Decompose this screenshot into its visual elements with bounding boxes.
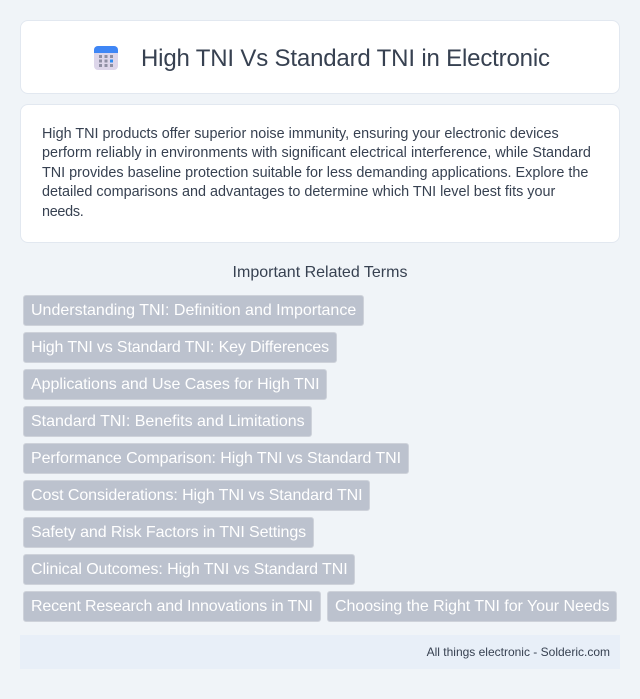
intro text: detailed comparisons and advantages to determine which TNI level best fits your [42, 184, 555, 200]
intro text: perform reliably in environments with significant electrical interference, while Standard [42, 145, 591, 161]
tag [23, 480, 370, 511]
footer [20, 635, 620, 669]
tag: Cost Considerations: High TNI vs Standard TNI [31, 487, 363, 504]
tag: Safety and Risk Factors in TNI Settings [31, 524, 306, 541]
tag: Understanding TNI: Definition and Importance [31, 302, 356, 319]
tag: Performance Comparison: High TNI vs Standard TNI [31, 450, 401, 467]
tag: High TNI vs Standard TNI: Key Differences [31, 339, 329, 356]
tag: Recent Research and Innovations in TNI [31, 598, 313, 615]
tag: Standard TNI: Benefits and Limitations [31, 413, 305, 430]
footer text: All things electronic - Solderic.com [427, 645, 610, 659]
section heading: Important Related Terms [233, 264, 407, 281]
intro text: High TNI products offer superior noise immunity, ensuring your electronic devices [42, 126, 559, 142]
tag: Applications and Use Cases for High TNI [31, 376, 320, 393]
intro panel [20, 104, 620, 243]
tag [23, 554, 355, 585]
tag [23, 295, 364, 326]
tag [23, 332, 337, 363]
tag [327, 591, 617, 622]
tag [23, 443, 409, 474]
intro text: needs. [42, 204, 83, 220]
intro text: TNI provides baseline protection suitable for less demanding applications. Explore the [42, 165, 588, 181]
icon: calendar [94, 46, 118, 70]
tag [23, 517, 314, 548]
tag list [23, 295, 617, 622]
tag [23, 591, 321, 622]
header panel [20, 20, 620, 94]
tag: Clinical Outcomes: High TNI vs Standard TNI [31, 561, 348, 578]
title: High TNI Vs Standard TNI in Electronic [141, 45, 550, 72]
intro text [42, 126, 591, 220]
tag: Choosing the Right TNI for Your Needs [335, 598, 609, 615]
tag [23, 369, 327, 400]
tag [23, 406, 312, 437]
